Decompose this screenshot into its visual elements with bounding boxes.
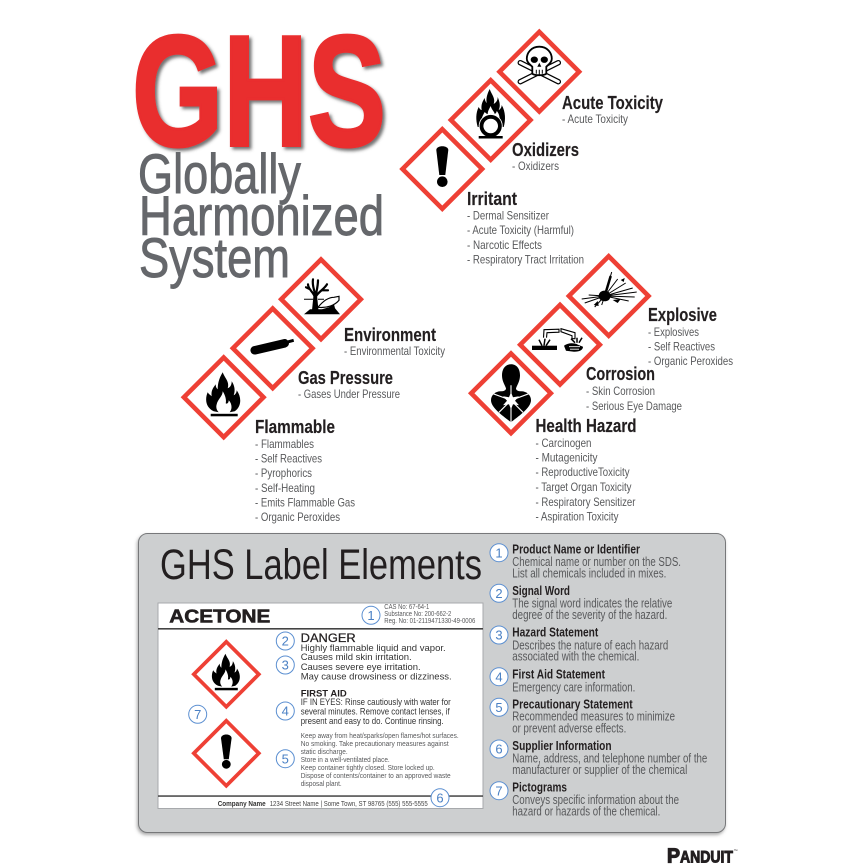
list: - Respiratory Tract Irritation (467, 252, 584, 266)
hazard: Environment (281, 260, 445, 358)
pictogram: flame (194, 642, 259, 707)
callout markers: 4 (282, 704, 289, 719)
hazard: Flammable (184, 358, 355, 524)
legend item 3: associated with the chemical. (512, 650, 639, 664)
legend item 6 (490, 739, 707, 777)
identifier numbers: CAS No: 67-64-1 (384, 604, 429, 611)
list: - Aspiration Toxicity (536, 510, 618, 524)
list: - Self-Heating (255, 481, 315, 495)
legend item 7: 7 (495, 783, 503, 798)
pictogram: exclamation mark (194, 721, 259, 786)
heading: Gas Pressure (298, 368, 393, 388)
legend item 2: 2 (495, 586, 503, 601)
legend item 5 (490, 697, 675, 735)
callout markers: 2 (282, 634, 289, 649)
list (648, 325, 733, 368)
legend item 5: or prevent adverse effects. (512, 721, 626, 735)
sample label: acetone (158, 603, 483, 808)
list: - Self Reactives (255, 452, 322, 466)
callout markers: 5 (282, 751, 289, 766)
legend item 2: degree of the severity of the hazard. (512, 608, 667, 622)
list: - Explosives (648, 325, 699, 339)
list: - Target Organ Toxicity (536, 480, 632, 494)
callout markers: 1 (367, 608, 375, 623)
list: - Organic Peroxides (255, 510, 340, 524)
list (586, 384, 682, 413)
legend item 5: 5 (495, 700, 503, 715)
legend item 1: 1 (495, 545, 503, 560)
hazard statements: Highly flammable liquid and vapor. (301, 643, 446, 654)
list (255, 437, 355, 524)
legend item 6: Name, address, and telephone number of the (512, 751, 707, 765)
list (467, 208, 584, 266)
list: - ReproductiveToxicity (536, 465, 630, 479)
list: - Respiratory Sensitizer (536, 495, 636, 509)
legend item 6: Supplier Information (512, 739, 612, 753)
list: - Flammables (255, 437, 314, 451)
callout markers: 6 (436, 790, 444, 805)
legend item 4: 4 (495, 669, 503, 684)
legend item 1: List all chemicals included in mixes. (512, 567, 666, 581)
hazard statements: Causes severe eye irritation. (301, 662, 421, 673)
hazard: Corrosion (520, 305, 682, 413)
list: - Pyrophorics (255, 466, 312, 480)
precautionary statements: disposal plant. (301, 781, 342, 788)
legend item 1: Product Name or Identifier (512, 542, 640, 556)
legend item 6: manufacturer or supplier of the chemical (512, 763, 687, 777)
pictogram: flame over circle (451, 80, 530, 160)
list: - Mutagenicity (536, 450, 598, 464)
heading: Oxidizers (512, 140, 579, 160)
legend item 3: Hazard Statement (512, 626, 599, 640)
list: - Environmental Toxicity (344, 344, 445, 358)
hazard: Explosive (569, 256, 733, 368)
legend item 7 (490, 781, 679, 818)
legend item 5: Precautionary Statement (512, 697, 633, 711)
legend item 7: Conveys specific information about the (512, 793, 679, 807)
subtitle: Globally Harmonized System: Globally (138, 142, 301, 205)
legend item 1 (490, 542, 681, 581)
legend item 2: Signal Word (512, 584, 570, 598)
logo: Panduit: ™ (734, 848, 738, 853)
legend item 2: The signal word indicates the relative (512, 596, 672, 610)
panel: GHS Label Elements (138, 534, 726, 832)
heading: Health Hazard (536, 416, 636, 436)
legend item 1: Chemical name or number on the SDS. (512, 555, 681, 569)
precautionary statements (301, 733, 459, 788)
heading: Irritant (467, 189, 517, 209)
list: - Skin Corrosion (586, 384, 655, 398)
pictogram: exploding bomb (569, 256, 648, 336)
callout markers: 7 (194, 707, 201, 722)
list: - Oxidizers (512, 159, 559, 173)
list: - Acute Toxicity (562, 112, 628, 126)
heading: Corrosion (586, 364, 655, 384)
precautionary statements: Keep container tightly closed. Store locked up. (301, 765, 435, 772)
panel background (138, 534, 726, 832)
legend item 7: hazard or hazards of the chemical. (512, 804, 660, 818)
heading: Explosive (648, 305, 717, 325)
supplier line: 1234 Street Name | Some Town, ST 98765 (555) 555-5555 (270, 801, 428, 808)
heading: Acute Toxicity (562, 93, 663, 113)
pictogram: flame (184, 358, 264, 437)
pictogram: health hazard silhouette (471, 354, 551, 433)
list: - Carcinogen (536, 436, 592, 450)
subtitle: Globally Harmonized System (138, 142, 384, 289)
precautionary statements: No smoking. Take precautionary measures against (301, 741, 449, 748)
heading: Environment (344, 325, 436, 345)
pictogram: dead tree and fish (281, 260, 361, 339)
list: - Narcotic Effects (467, 238, 542, 252)
precautionary statements: Store in a well-ventilated place. (301, 757, 390, 764)
hazard statements: Causes mild skin irritation. (301, 652, 412, 663)
identifier numbers (384, 604, 475, 625)
pictogram: gas cylinder (233, 308, 312, 388)
legend item 2 (490, 584, 672, 622)
precautionary statements: Dispose of contents/container to an approved waste (301, 773, 451, 780)
list: - Emits Flammable Gas (255, 496, 355, 510)
first aid: present and easy to do. Continue rinsing. (301, 716, 444, 727)
title: GHS: GHS (132, 4, 386, 180)
supplier line: Company Name (218, 801, 266, 808)
logo: Panduit (667, 846, 738, 864)
hazard: Acute Toxicity (500, 32, 663, 126)
list (536, 436, 636, 524)
legend item 4 (490, 667, 635, 694)
hazard statements: May cause drowsiness or dizziness. (301, 671, 452, 682)
list: - Acute Toxicity (Harmful) (467, 223, 574, 237)
heading: Flammable (255, 417, 335, 437)
legend item 6: 6 (495, 742, 503, 757)
hazard statements (301, 643, 452, 682)
first aid: FIRST AID (301, 688, 347, 700)
list: - Serious Eye Damage (586, 399, 682, 413)
first aid: several minutes. Remove contact lenses, if (301, 706, 450, 717)
supplier line (218, 801, 428, 808)
legend item 3: 3 (495, 628, 503, 643)
first aid: IF IN EYES: Rinse cautiously with water for (301, 697, 451, 708)
legend item 4: First Aid Statement (512, 667, 606, 681)
precautionary statements: Keep away from heat/sparks/open flames/hot surfaces. (301, 733, 459, 740)
panel heading: GHS Label Elements (160, 541, 482, 589)
legend item 4: Emergency care information. (512, 680, 635, 694)
subtitle: Globally Harmonized System: Harmonized (139, 184, 384, 247)
legend item 3 (490, 626, 668, 664)
pictogram: skull and crossbones (500, 32, 579, 112)
callout markers: 3 (282, 658, 289, 673)
product name: ACETONE (169, 606, 270, 626)
list: - Dermal Sensitizer (467, 208, 549, 222)
pictogram: exclamation mark (402, 129, 482, 209)
precautionary statements: static discharge. (301, 749, 348, 756)
list: - Organic Peroxides (648, 354, 733, 368)
legend item 7: Pictograms (512, 781, 567, 795)
hazard: Gas Pressure (233, 308, 400, 401)
legend item 3: Describes the nature of each hazard (512, 638, 668, 652)
hazard: Irritant (402, 129, 584, 266)
label sheet (158, 603, 483, 808)
hazard: Oxidizers (451, 80, 579, 173)
callout markers (189, 606, 449, 807)
hazard: Health Hazard (471, 354, 636, 524)
signal word: DANGER (301, 631, 356, 645)
pictogram: corrosive liquid (520, 305, 600, 384)
identifier numbers: Reg. No: 01-2119471330-49-0006 (384, 618, 475, 625)
list: - Self Reactives (648, 340, 715, 354)
identifier numbers: Substance No: 200-662-2 (384, 611, 451, 618)
subtitle: Globally Harmonized System: System (139, 226, 290, 289)
legend item 5: Recommended measures to minimize (512, 710, 675, 724)
first aid (301, 688, 451, 727)
list: - Gases Under Pressure (298, 387, 400, 401)
